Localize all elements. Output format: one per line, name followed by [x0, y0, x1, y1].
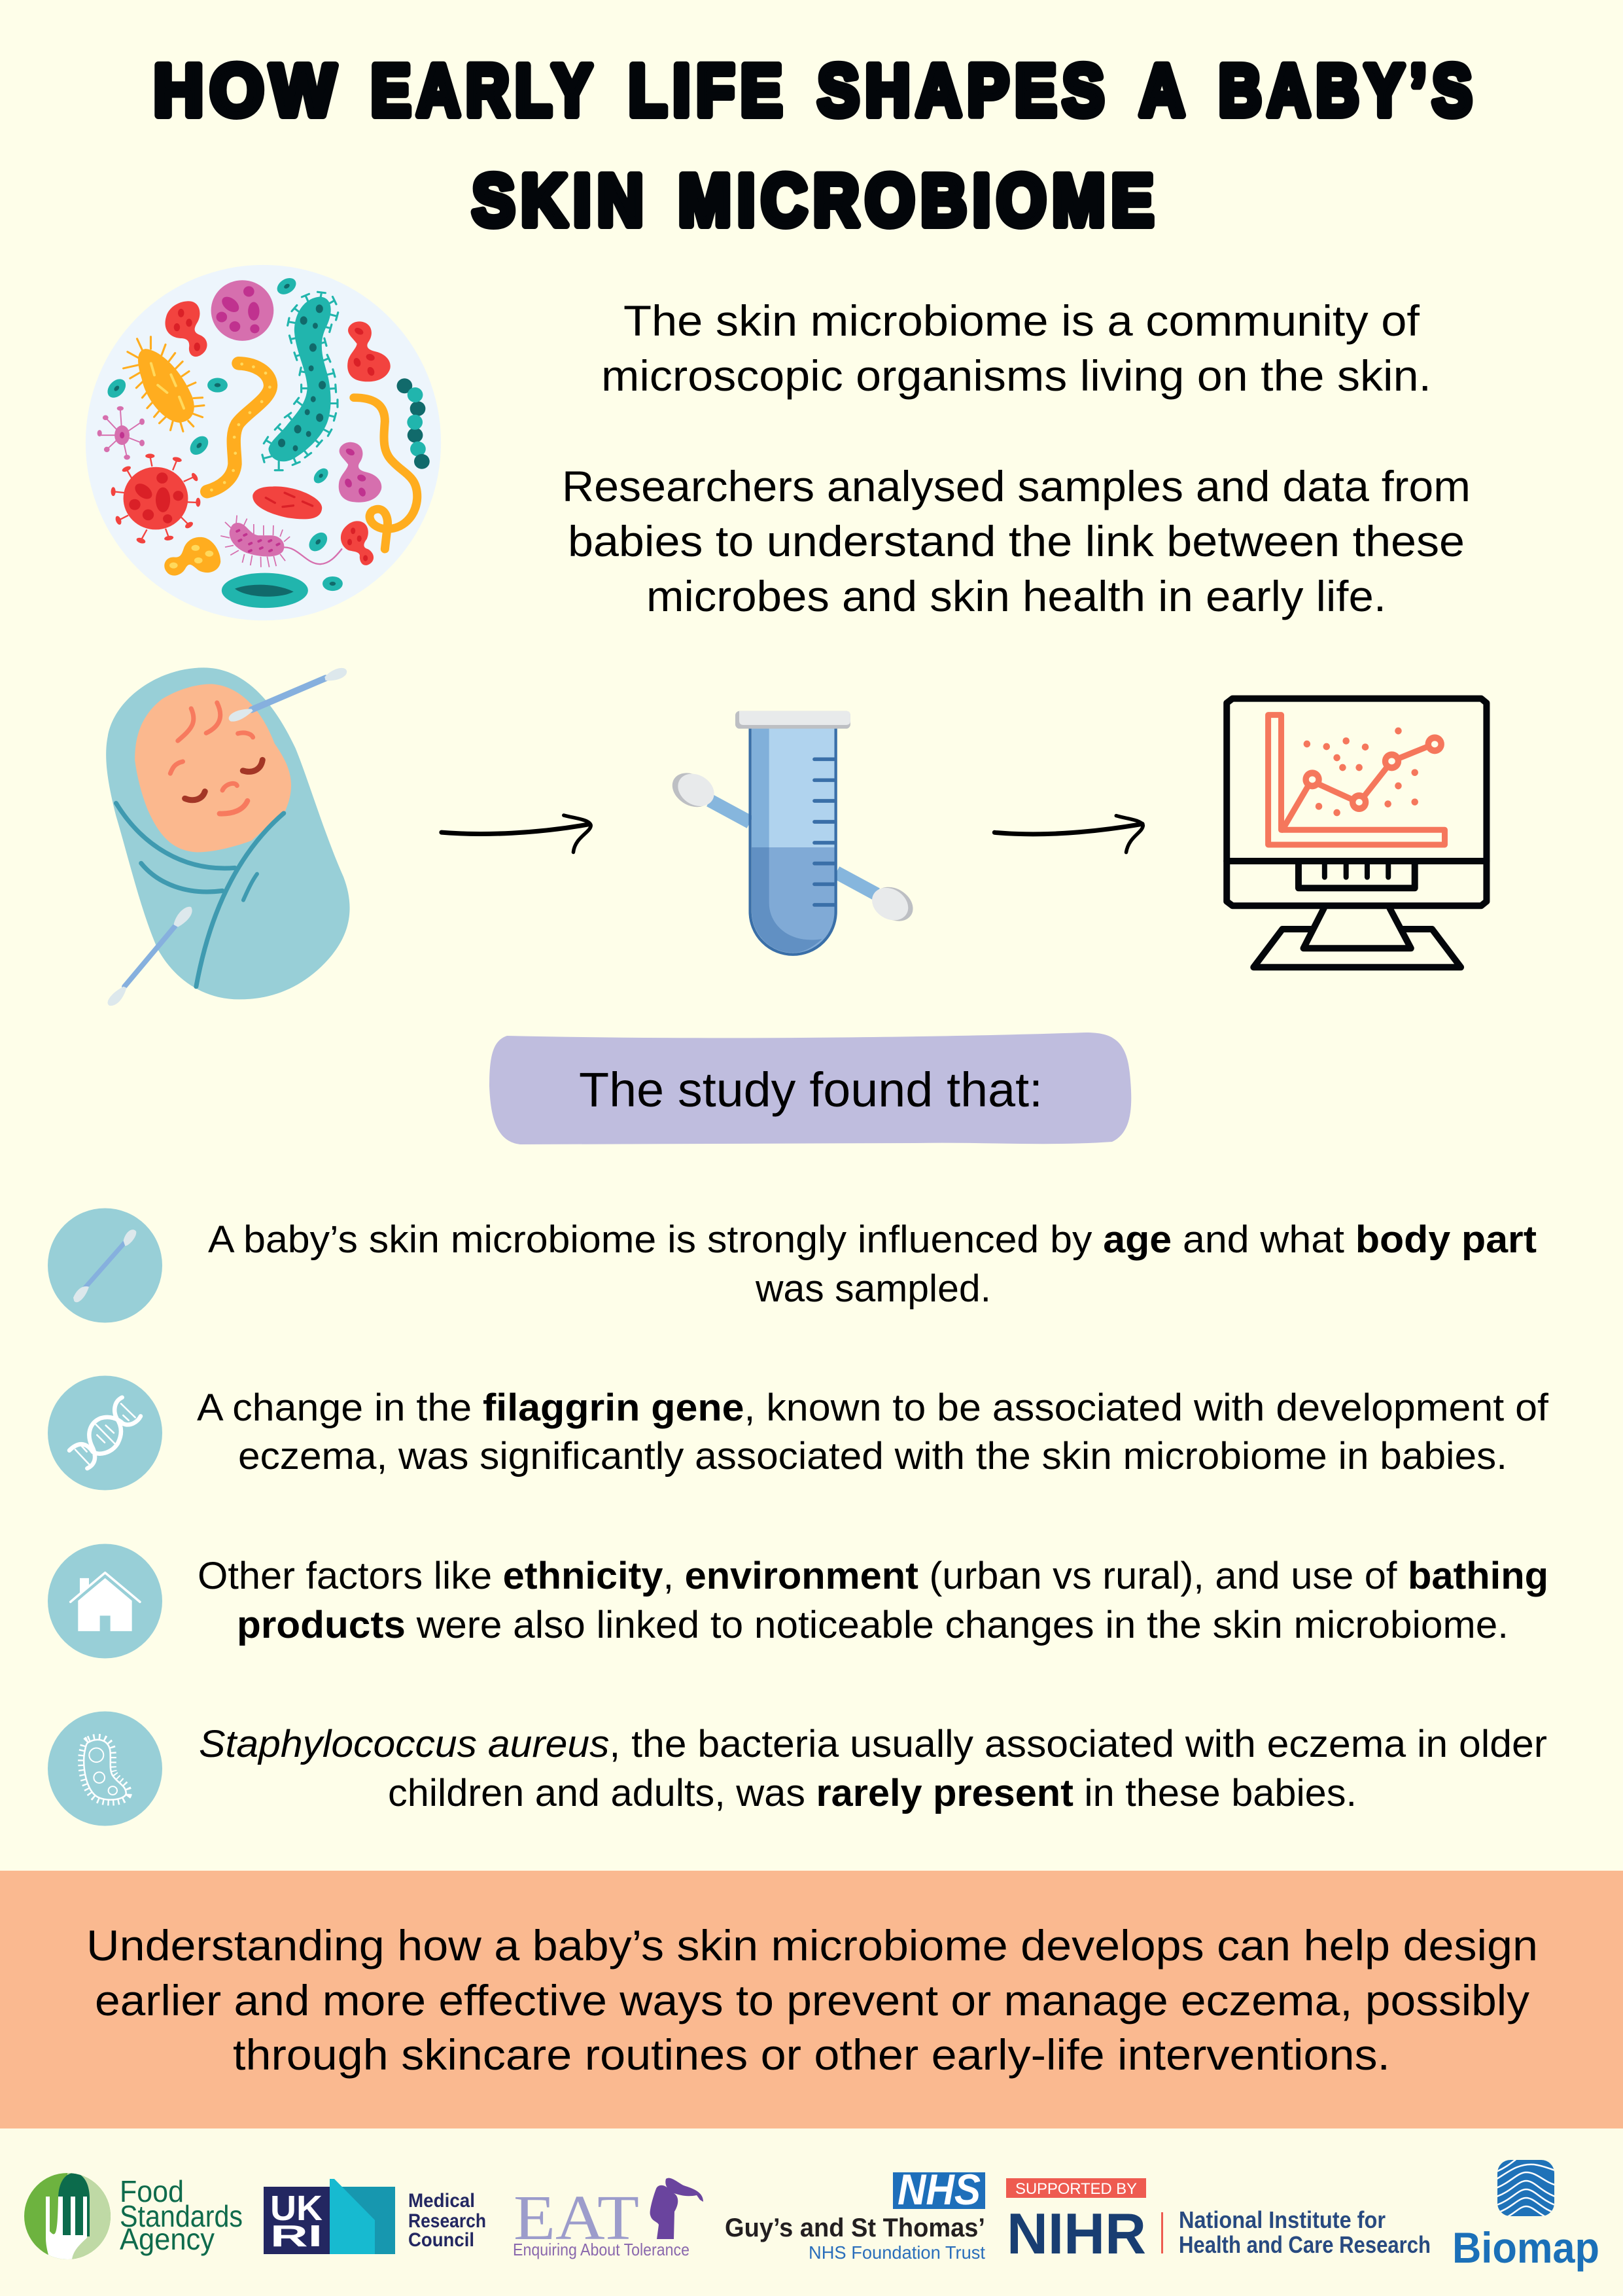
logo: Food Standards Agency: Standards — [120, 2199, 243, 2233]
title: EARLY — [371, 50, 598, 131]
logo: Biomap: Biomap — [1452, 2223, 1599, 2272]
conclusion band: through skincare routines or other early-life interventions. — [233, 2030, 1390, 2079]
logo: NHS Guy's and St Thomas': Guy’s and St Thomas’ — [725, 2214, 985, 2242]
finding 4: bacterium icon — [48, 1712, 162, 1826]
logo: EAT Enquiring About Tolerance: Enquiring About Tolerance — [513, 2240, 689, 2259]
finding 1: swab icon — [48, 1208, 162, 1323]
intro text: microscopic organisms living on the skin. — [601, 351, 1431, 400]
conclusion band — [0, 1871, 1623, 2128]
logo: Food Standards Agency: Agency — [120, 2222, 215, 2256]
logo: NHS Guy's and St Thomas' — [725, 2165, 985, 2263]
conclusion band: Understanding how a baby’s skin microbiome develops can help design — [86, 1921, 1538, 1969]
finding 1 text: was sampled. — [755, 1267, 991, 1310]
intro text: babies to understand the link between these — [568, 517, 1465, 565]
intro text: microbes and skin health in early life. — [646, 572, 1386, 620]
intro text — [562, 296, 1471, 620]
logo: NIHR supported by — [1006, 2178, 1431, 2266]
finding 4 text: Staphylococcus aureus , the bacteria usually associated with eczema in older — [199, 1723, 1547, 1765]
logo: UKRI Medical Research Council: Medical — [408, 2190, 475, 2212]
logo: UKRI Medical Research Council: Council — [408, 2229, 474, 2251]
icon: computer monitor with chart — [1227, 699, 1486, 967]
logo: Food Standards Agency: Food — [120, 2174, 184, 2208]
finding 2 text: A change in the filaggrin gene , known to be associated with development of — [197, 1386, 1549, 1429]
title — [154, 50, 1478, 241]
finding 3 text: Other factors like ethnicity, environment (urban vs rural), and use of bathing — [198, 1555, 1548, 1597]
title: SKIN — [472, 160, 650, 241]
finding 2: DNA icon — [48, 1375, 162, 1491]
title: HOW — [154, 50, 342, 131]
title: SHAPES — [818, 50, 1110, 131]
finding 2 text: eczema, was significantly associated with the skin microbiome in babies. — [238, 1435, 1507, 1477]
finding 3 text — [198, 1555, 1548, 1646]
finding 1 text — [208, 1218, 1537, 1310]
finding 2 text — [197, 1386, 1549, 1477]
finding 4 text: children and adults, was rarely present in these babies. — [388, 1772, 1357, 1814]
logo: UKRI Medical Research Council: RI — [270, 2219, 323, 2253]
finding 4 text — [199, 1723, 1547, 1814]
title: A — [1140, 50, 1191, 131]
logo: UKRI Medical Research Council — [264, 2179, 486, 2254]
illustration: swaddled baby with swabs — [106, 667, 350, 1006]
illustration: test tube with swab — [666, 711, 919, 955]
logo: UKRI Medical Research Council: Research — [408, 2210, 486, 2232]
arrow: baby to test tube — [442, 815, 591, 852]
logo: NHS Guy's and St Thomas': NHS — [898, 2165, 981, 2214]
title: MICROBIOME — [678, 160, 1160, 241]
finding 1 text: A baby’s skin microbiome is strongly influenced by age and what body part — [208, 1218, 1537, 1261]
logo: Biomap — [1452, 2153, 1599, 2272]
intro text: Researchers analysed samples and data from — [562, 462, 1471, 510]
heading pill: the study found that: The study found that: — [579, 1063, 1043, 1117]
arrow: test tube to computer — [994, 816, 1143, 853]
intro text: The skin microbiome is a community of — [623, 296, 1420, 345]
logo: UKRI Medical Research Council: UK — [270, 2189, 323, 2228]
logo: EAT Enquiring About Tolerance: EAT — [514, 2183, 639, 2253]
title: LIFE — [629, 50, 788, 131]
logo: EAT Enquiring About Tolerance — [513, 2178, 703, 2259]
logo: NHS Guy's and St Thomas': NHS Foundation Trust — [809, 2242, 985, 2263]
title: BABY’S — [1219, 50, 1478, 131]
finding 3 text: products were also linked to noticeable changes in the skin microbiome. — [237, 1604, 1509, 1646]
illustration: microbes circle — [86, 265, 441, 620]
heading pill: the study found that — [489, 1033, 1131, 1144]
logo: Food Standards Agency — [24, 2173, 243, 2259]
conclusion band: earlier and more effective ways to prevent or manage eczema, possibly — [95, 1976, 1529, 2024]
finding 3: house icon — [48, 1544, 162, 1658]
logo: NIHR supported by: Health and Care Research — [1179, 2231, 1431, 2258]
logo: NIHR supported by: National Institute for — [1179, 2206, 1386, 2233]
logo: NIHR supported by: NIHR — [1007, 2201, 1146, 2266]
logo: NIHR supported by: SUPPORTED BY — [1015, 2180, 1137, 2198]
